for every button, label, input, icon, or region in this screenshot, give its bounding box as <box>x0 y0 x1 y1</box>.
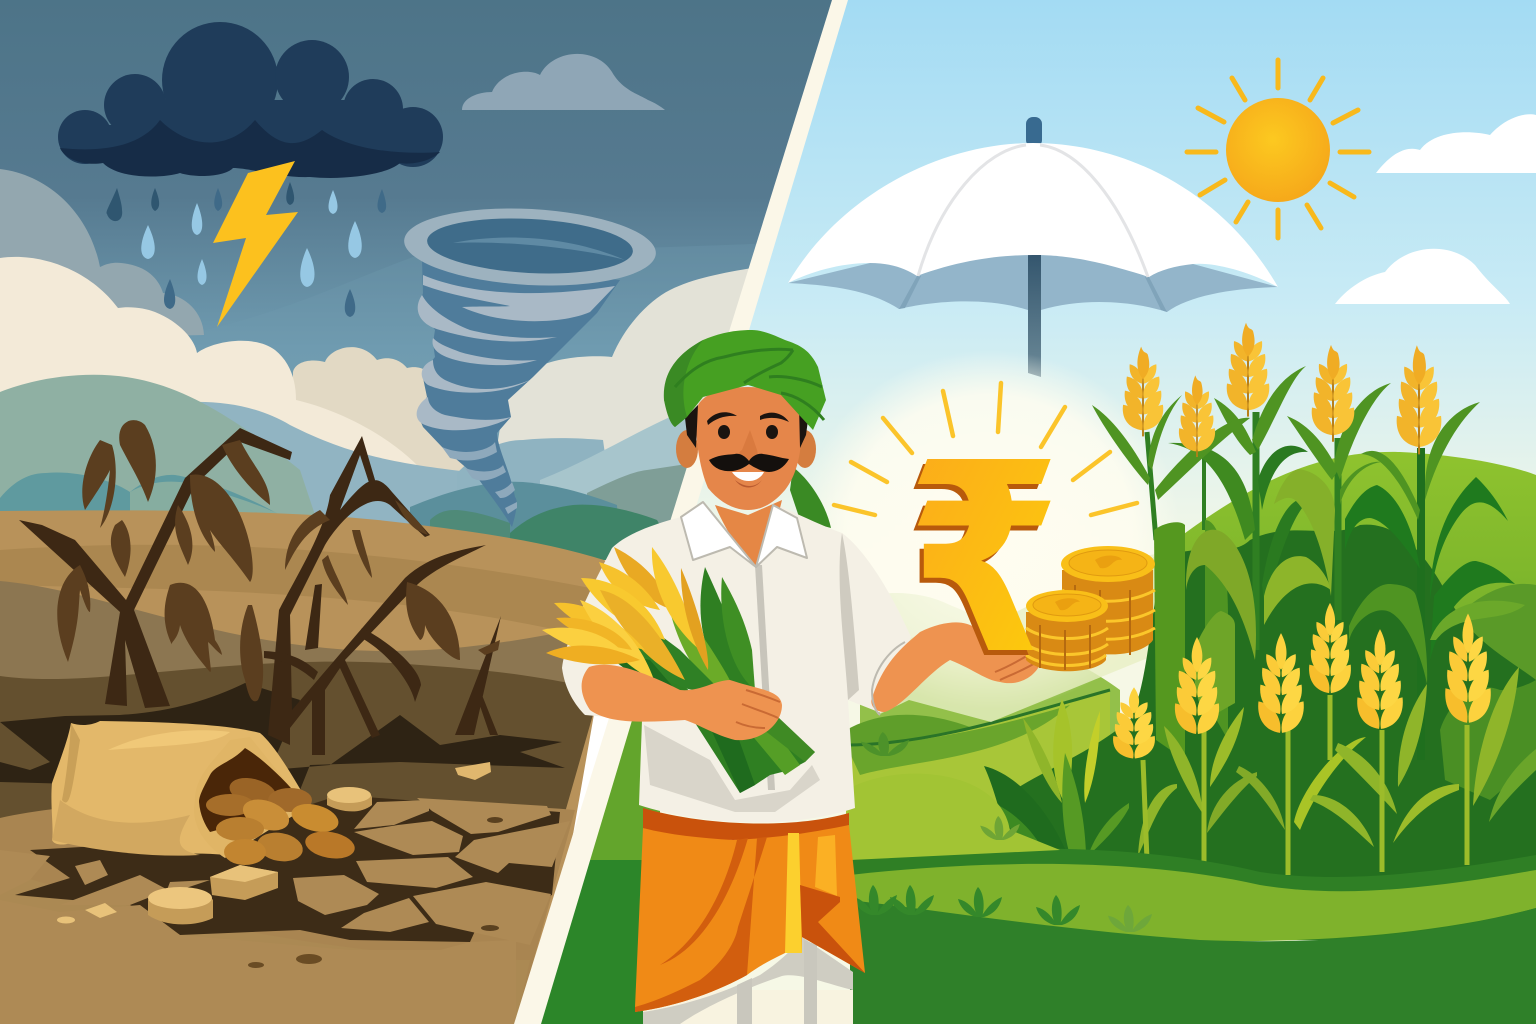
panel: sunny protected field side <box>530 0 1536 1024</box>
white lower dhoti <box>643 937 853 1024</box>
dirt clods <box>57 762 503 968</box>
arm holding bouquet <box>582 665 782 740</box>
face <box>696 387 801 510</box>
earth tiles <box>36 798 559 935</box>
white diagonal divider <box>514 0 848 1024</box>
tornado body <box>417 260 620 527</box>
cloud: lower right <box>1335 249 1510 304</box>
grass tufts <box>853 732 1152 932</box>
shirt <box>562 503 911 822</box>
storm cloud underside <box>60 120 440 178</box>
mid leaves <box>1154 469 1536 800</box>
cloud: upper right <box>1376 114 1536 173</box>
nose <box>739 430 758 461</box>
hair <box>685 405 808 448</box>
collar <box>681 502 807 567</box>
cloud: beige small <box>292 347 464 471</box>
tornado bands <box>417 275 615 514</box>
umbrella canopy <box>788 143 1278 287</box>
icon: protective umbrella <box>788 117 1278 377</box>
tall coin stack <box>1061 546 1155 658</box>
icon: lightning bolt <box>213 161 298 327</box>
plant middle <box>268 436 486 755</box>
umbrella ribs <box>918 145 1148 277</box>
spilled grain <box>206 773 357 865</box>
eyebrows <box>707 412 789 425</box>
smile <box>732 472 764 481</box>
rupee symbol: ₹ <box>902 413 1057 717</box>
background sky swirls <box>205 240 840 420</box>
turban tail <box>790 467 831 528</box>
eyes <box>718 425 778 439</box>
panel: storm and drought side <box>0 0 840 1024</box>
orange dhoti <box>635 808 865 1012</box>
distant hills <box>0 375 720 560</box>
bouquet stems <box>632 645 815 793</box>
plant broken stick <box>455 616 501 735</box>
neck <box>715 500 782 567</box>
tall wheat heads <box>1123 323 1441 457</box>
cloud: grey-blue left bank <box>0 169 204 340</box>
umbrella underside <box>788 255 1278 312</box>
tornado rim <box>404 208 656 286</box>
grain sack <box>51 721 357 865</box>
rupee rays <box>834 383 1137 515</box>
rain drops <box>107 182 386 317</box>
short coin stack <box>1026 590 1108 671</box>
waist sash <box>643 808 849 840</box>
bright sky <box>660 0 1536 990</box>
low stalks <box>1143 695 1467 875</box>
withered leaves <box>57 420 500 701</box>
coin stacks <box>1026 546 1155 671</box>
stormy sky <box>0 0 832 440</box>
foreground meadow <box>530 715 1536 1024</box>
sack opening <box>199 748 291 832</box>
cloud: grey-blue distant <box>462 54 665 110</box>
farmer <box>542 330 1042 1024</box>
arm holding coins <box>871 622 1042 715</box>
cloud: cream right bank <box>498 268 749 450</box>
bouquet blades <box>600 567 755 695</box>
plant left <box>19 428 292 708</box>
dry ground <box>0 510 620 1024</box>
ears <box>676 430 816 468</box>
bouquet grain heads <box>542 547 708 680</box>
crack network <box>15 795 560 942</box>
glow behind rupee <box>800 350 1180 722</box>
cloud: cream left bank <box>0 257 430 480</box>
dark ground shadow <box>0 683 565 790</box>
tall stalks <box>1147 412 1421 760</box>
green turban <box>664 330 826 430</box>
upper leaves <box>1092 366 1515 660</box>
back green hills <box>846 452 1536 860</box>
wheat bouquet <box>542 547 815 793</box>
dead crops <box>19 428 501 755</box>
low leaves <box>984 667 1536 856</box>
storm cloud <box>58 22 443 178</box>
side branches <box>264 584 421 702</box>
mustache <box>709 454 789 472</box>
rupee symbol: ₹ <box>907 408 1061 712</box>
cracked earth <box>15 798 560 942</box>
umbrella pole <box>1028 255 1041 377</box>
low wheat heads <box>1113 603 1491 758</box>
dark foliage mass <box>1000 525 1536 890</box>
icon: sun <box>1187 60 1369 238</box>
dhoti folds <box>635 837 767 1012</box>
corn field <box>984 323 1536 890</box>
icon: tornado <box>402 202 658 527</box>
